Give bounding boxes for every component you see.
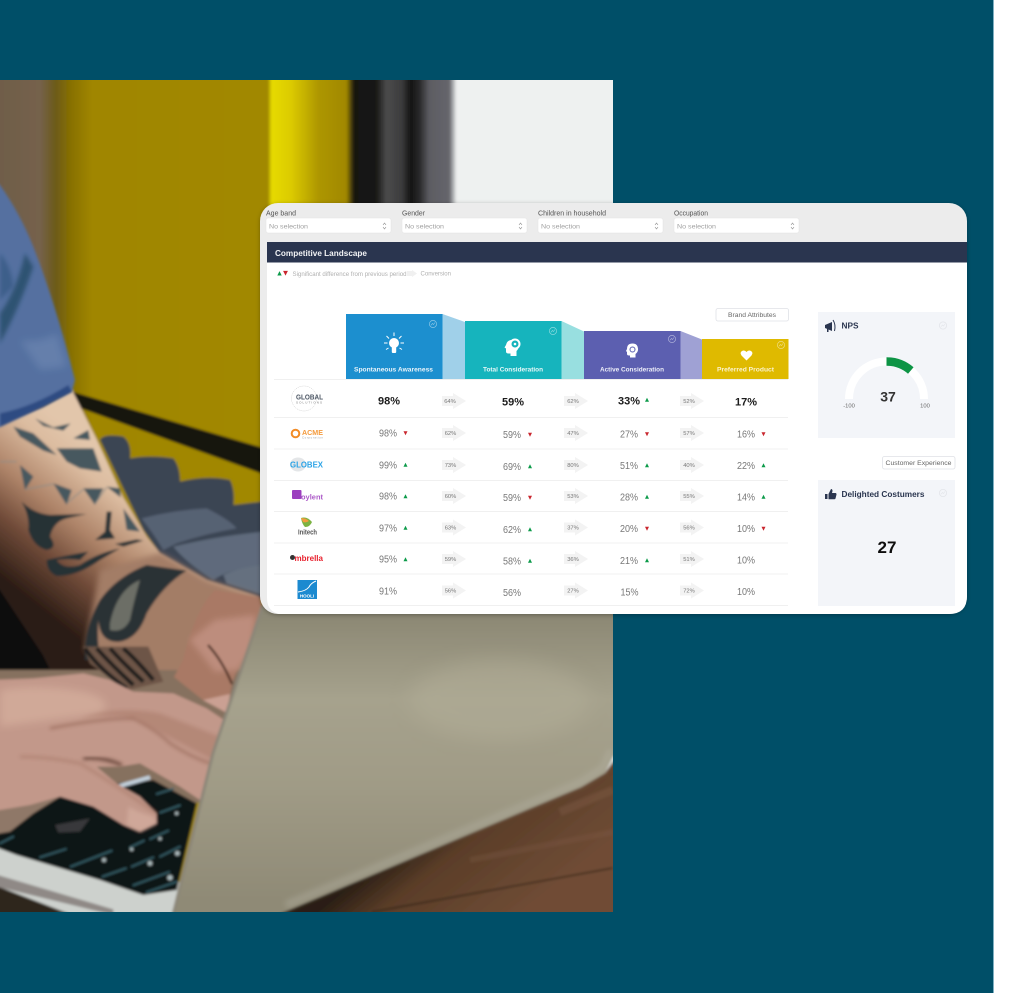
row: Umbrella: 59% <box>445 557 456 563</box>
logo: ACME: ACME <box>302 428 323 437</box>
filter: children in household: Children in household <box>538 210 606 218</box>
legend: Conversion <box>420 272 451 278</box>
grey blanket <box>100 436 277 603</box>
icon: head with smile <box>626 344 638 358</box>
row: Globex: 99% <box>379 460 397 472</box>
funnel: total consideration <box>465 321 562 379</box>
header bar: Competitive Landscape <box>267 242 967 262</box>
panel: NPS: NPS <box>842 322 859 330</box>
row: Global Solutions: 17% <box>735 396 757 408</box>
funnel: active consideration <box>584 331 680 379</box>
row: Soylent: 60% <box>445 494 456 500</box>
row: Hooli: 91% <box>379 586 397 598</box>
filter: gender <box>402 210 527 233</box>
wooden table <box>280 759 613 912</box>
row: Soylent: 98% <box>379 492 397 502</box>
logo: Hooli <box>298 580 317 599</box>
filler behind the hands <box>0 667 239 804</box>
keyboard keys <box>0 789 180 892</box>
row: Soylent: 14% <box>737 492 755 504</box>
row: Globex: 22% <box>737 461 755 472</box>
panel: NPS <box>818 312 955 438</box>
row: Initech <box>298 518 766 536</box>
photo background: wall, yellow door and window <box>0 80 613 883</box>
filter: age band <box>266 210 391 233</box>
row: Hooli <box>298 580 755 599</box>
black chair bar <box>73 391 260 474</box>
row: ACME: 57% <box>683 431 695 437</box>
funnel connector 2 <box>562 321 584 379</box>
rear hand <box>174 596 262 700</box>
photo: tattooed person typing on a laptop <box>0 60 640 940</box>
row: Soylent: 59% <box>503 493 521 504</box>
logo: Soylent <box>292 490 323 502</box>
laptop base and keyboard <box>0 777 197 923</box>
row: Umbrella <box>290 551 755 568</box>
NPS gauge: -100 <box>843 404 855 410</box>
filter: occupation <box>674 210 799 233</box>
row: Global Solutions <box>292 386 757 411</box>
dashboard card <box>260 203 967 614</box>
filter: gender: Gender <box>402 210 426 218</box>
NPS gauge: 37 <box>880 388 896 404</box>
header bar: Competitive Landscape: Competitive Landscape <box>275 248 367 258</box>
logo: Global Solutions <box>292 386 323 411</box>
row: Global Solutions: 98% <box>378 396 400 408</box>
filter: children in household: No selection <box>541 224 580 230</box>
row: Initech: 63% <box>445 526 456 532</box>
logo: Global Solutions: GLOBAL <box>296 392 323 402</box>
logo: Global Solutions: SOLUTIONS <box>296 400 322 404</box>
row: Soylent <box>292 488 766 504</box>
icon: heart <box>741 350 752 360</box>
laptop lid <box>172 605 625 915</box>
front typing hand <box>0 673 227 832</box>
icon: head with gear <box>504 340 520 356</box>
logo: Globex <box>290 458 324 472</box>
row: Hooli: 27% <box>567 588 579 594</box>
row: ACME: 59% <box>503 430 521 441</box>
row: Globex: 69% <box>503 462 521 473</box>
row: Globex <box>290 457 766 473</box>
row: Umbrella: 95% <box>379 554 397 566</box>
blue t-shirt sleeve <box>0 177 75 430</box>
filter: occupation: No selection <box>677 224 716 230</box>
logo: Initech: Initech <box>298 530 317 536</box>
button: Brand Attributes <box>716 308 788 321</box>
row: ACME: 27% <box>620 430 638 440</box>
funnel: spontaneous awareness <box>346 314 442 379</box>
row: Hooli: 56% <box>503 588 521 599</box>
button: Customer Experience: Customer Experience <box>886 460 952 467</box>
row: Global Solutions: 62% <box>567 399 579 405</box>
panel: Delighted Costumers: Delighted Costumers <box>842 489 925 499</box>
wrist tattoo <box>85 565 187 660</box>
row: Global Solutions: 52% <box>683 399 695 405</box>
row: Umbrella: 51% <box>683 557 695 563</box>
icon: megaphone <box>825 320 835 332</box>
funnel connector 1 <box>442 314 465 379</box>
row: ACME: 16% <box>737 430 755 440</box>
icon: light bulb <box>384 332 404 353</box>
filter: age band: No selection <box>269 224 308 230</box>
row: Hooli: 72% <box>683 588 695 594</box>
funnel connector 3 <box>680 331 702 379</box>
row: Hooli: 15% <box>620 588 639 598</box>
NPS gauge: 100 <box>920 404 930 410</box>
row: Initech: 37% <box>567 526 579 532</box>
filter: occupation: Occupation <box>674 210 708 218</box>
row: Soylent: 55% <box>683 494 695 500</box>
NPS gauge <box>843 362 930 410</box>
white content area <box>267 242 967 614</box>
row: ACME <box>292 425 766 441</box>
row: Globex: 73% <box>445 463 456 469</box>
filter: age band: Age band <box>266 210 296 218</box>
row: Initech: 97% <box>379 524 397 534</box>
button: Customer Experience <box>882 456 955 469</box>
white right margin <box>993 0 1024 993</box>
row: Globex: 40% <box>683 463 695 469</box>
funnel: preferred product <box>702 339 788 379</box>
row: Global Solutions: 33% <box>618 396 640 408</box>
dark area below the forearm <box>0 588 51 671</box>
logo: Globex: GLOBEX <box>290 460 324 470</box>
logo: ACME <box>292 428 323 440</box>
funnel: total consideration: Total Consideration <box>483 366 543 374</box>
logo: Umbrella: mbrella <box>294 554 324 563</box>
funnel: active consideration: Active Consideration <box>600 366 664 374</box>
row: Global Solutions: 64% <box>444 399 456 405</box>
logo: Initech <box>298 518 317 536</box>
row: Global Solutions: 59% <box>502 396 524 408</box>
arm tattoos <box>0 418 187 660</box>
logo: ACME: Corporation <box>302 436 323 440</box>
row: Umbrella: 10% <box>737 556 755 566</box>
row: ACME: 47% <box>567 431 579 437</box>
row: Umbrella: 36% <box>567 557 579 563</box>
legend: Significant difference from previous period <box>292 272 406 278</box>
panel: Delighted Costumers: 27 <box>878 538 896 557</box>
row: Soylent: 28% <box>620 492 638 504</box>
wrist tattoo fan <box>83 647 163 691</box>
button: Brand Attributes: Brand Attributes <box>728 312 777 319</box>
row: Initech: 10% <box>737 524 755 535</box>
row: Initech: 62% <box>503 525 521 536</box>
panel: Delighted Costumers <box>818 480 955 606</box>
funnel: spontaneous awareness: Spontaneous Awareness <box>354 366 433 374</box>
logo: Soylent: oylent <box>301 492 323 502</box>
row: ACME: 98% <box>379 428 397 440</box>
wrist skin tone <box>81 550 260 672</box>
row: Initech: 20% <box>620 524 638 535</box>
filter: children in household <box>538 210 663 233</box>
icon: thumbs up <box>825 489 836 499</box>
filter: gender: No selection <box>405 224 444 230</box>
row: Umbrella: 21% <box>620 556 638 567</box>
row: Initech: 56% <box>683 526 695 532</box>
funnel: preferred product: Preferred Product <box>717 366 775 374</box>
tattooed forearm <box>0 390 265 690</box>
row: Umbrella: 58% <box>503 556 521 568</box>
legend <box>277 270 451 278</box>
row: Globex: 51% <box>620 461 638 472</box>
row: Globex: 80% <box>567 463 579 469</box>
logo: Hooli: HOOLI <box>300 594 314 598</box>
row: Hooli: 10% <box>737 587 755 598</box>
row: Soylent: 53% <box>567 494 579 500</box>
row: ACME: 62% <box>445 431 456 437</box>
row: Hooli: 56% <box>445 588 456 594</box>
